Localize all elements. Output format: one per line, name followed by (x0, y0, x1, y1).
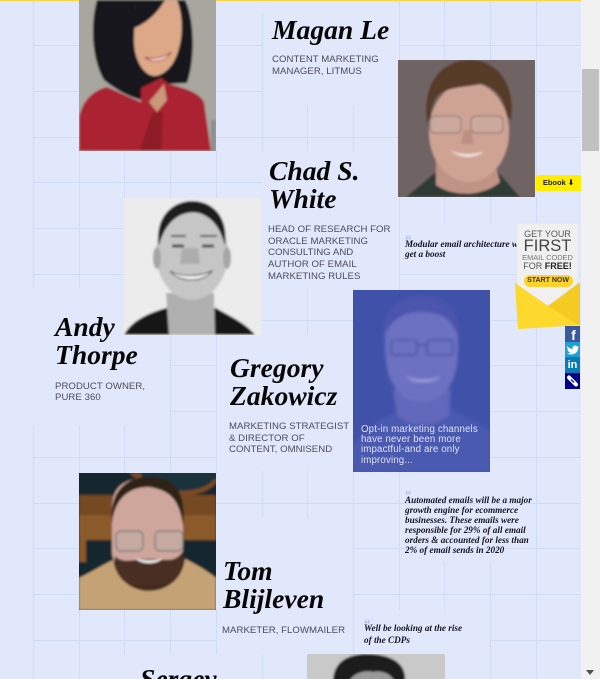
card text: Opt-in marketing channels (361, 424, 478, 435)
quote: Modular email (404, 232, 526, 259)
icon: link (565, 373, 580, 389)
card text: impactful-and are only (361, 444, 460, 455)
icon: linkedin (565, 357, 580, 373)
role: Chad S. White: CONSULTING AND (268, 247, 353, 258)
scrollbar (581, 0, 600, 679)
role: Chad S. White: ORACLE MARKETING (268, 236, 368, 247)
role: Magan Le: CONTENT MARKETING (272, 54, 379, 65)
promo text: GET YOUR (524, 229, 571, 239)
role: Chad S. White: HEAD OF RESEARCH FOR (268, 224, 391, 235)
quote: CDPs: of the CDPs (364, 635, 410, 645)
photo: Magan Le (79, 0, 216, 151)
name: Gregory Zakowicz: Zakowicz (230, 380, 337, 411)
quote: Automated emails: responsible for 29% of all email (405, 525, 526, 535)
role: Gregory Zakowicz: & DIRECTOR OF (229, 433, 305, 444)
quote: Modular email: Modular email architecture will (405, 239, 526, 249)
photo: Chad S. White (398, 60, 535, 197)
quote: CDPs (364, 616, 462, 645)
photo: Sergey (307, 654, 445, 679)
button: start now (524, 275, 572, 287)
name: Chad S. White: Chad S. (269, 155, 360, 186)
quote: Modular email: “ (405, 232, 412, 247)
role: Gregory Zakowicz: CONTENT, OMNISEND (229, 444, 332, 455)
name: Tom Blijleven: Blijleven (223, 583, 324, 614)
quote: Modular email: get a boost (405, 249, 445, 259)
name: Andy Thorpe: Thorpe (55, 339, 138, 370)
quote: Automated emails: 2% of email sends in 2020 (405, 545, 504, 555)
name: Chad S. White (269, 155, 360, 214)
scrollbar thumb (582, 69, 599, 151)
role: Chad S. White: MARKETING RULES (268, 271, 360, 282)
role: Andy Thorpe: PURE 360 (55, 392, 101, 403)
quote: Automated emails (404, 487, 532, 555)
name: Tom Blijleven: Tom (223, 555, 273, 586)
photo: Gregory tinted portrait (354, 296, 490, 472)
article card: Gregory Zakowicz (353, 290, 490, 472)
role: Chad S. White: AUTHOR OF EMAIL (268, 259, 357, 270)
promo text: FOR FREE! (523, 260, 572, 270)
photo: Tom Blijleven (79, 473, 216, 610)
role: Tom Blijleven: MARKETER, FLOWMAILER (222, 625, 345, 636)
quote: Automated emails: growth engine for ecommerce (405, 505, 518, 515)
promo text: FIRST (524, 237, 571, 255)
quote: Automated emails: “ (405, 487, 412, 502)
icon: twitter (565, 342, 580, 357)
name: Chad S. White: White (269, 183, 336, 214)
role: Chad S. White (268, 224, 391, 282)
card text: improving... (361, 455, 413, 466)
button: Ebook download: Ebook ⬇ (543, 178, 574, 187)
promo card: first email coded for free (515, 223, 580, 329)
quote: Automated emails: businesses. These emails were (405, 515, 519, 525)
icon: facebook (565, 326, 580, 342)
top yellow bar (0, 0, 581, 1)
scrollbar down arrow (586, 670, 594, 675)
role: Magan Le (272, 54, 379, 77)
name: Magan Le: Magan Le (272, 14, 389, 45)
button: start now: START NOW (527, 277, 569, 284)
envelope back (515, 223, 580, 329)
card text: have never been more (361, 434, 461, 445)
social share icons (565, 326, 580, 389)
icon: linkedin: in (568, 359, 577, 371)
name: Tom Blijleven (222, 555, 324, 614)
icon: facebook: f (571, 327, 576, 343)
role: Andy Thorpe (55, 380, 145, 403)
button: Ebook download (536, 175, 581, 191)
name: Gregory Zakowicz (230, 352, 338, 411)
quote: Automated emails: Automated emails will be a major (405, 495, 532, 505)
card text (361, 424, 478, 466)
name: Andy Thorpe: Andy (55, 311, 115, 342)
role: Andy Thorpe: PRODUCT OWNER, (55, 380, 145, 392)
promo text: EMAIL CODED (522, 253, 573, 262)
quote: CDPs: Well be looking at the rise (364, 623, 462, 633)
photo: Andy Thorpe (124, 198, 261, 335)
role: Gregory Zakowicz (229, 421, 349, 455)
name: Andy Thorpe (54, 311, 138, 370)
role: Gregory Zakowicz: MARKETING STRATEGIST (229, 421, 349, 432)
role: Magan Le: MANAGER, LITMUS (272, 66, 362, 77)
promo text (522, 229, 573, 270)
quote: Automated emails: orders & accounted for less than (405, 535, 529, 545)
name: Gregory Zakowicz: Gregory (230, 352, 324, 383)
quote: CDPs: “ (364, 616, 370, 631)
